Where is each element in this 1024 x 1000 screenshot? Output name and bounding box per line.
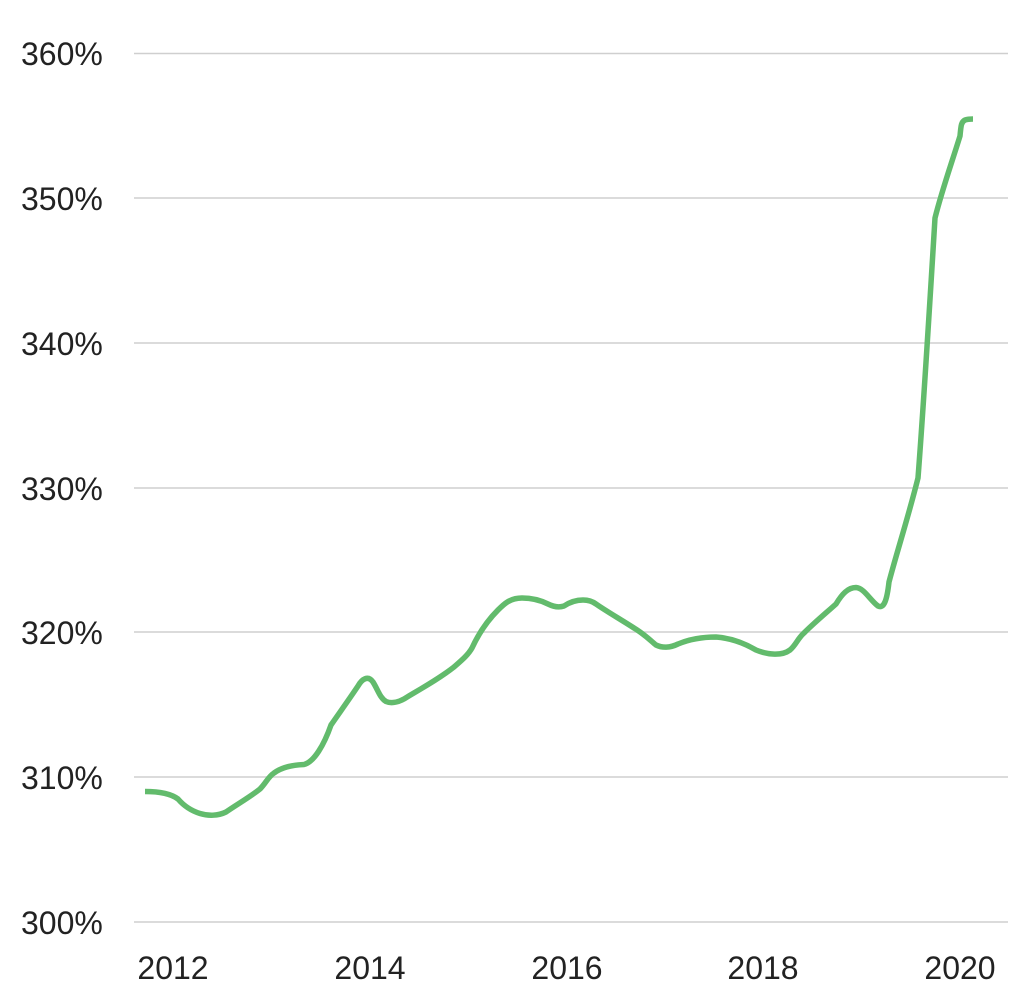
x axis labels: [137, 950, 996, 986]
y axis labels: 350%: [21, 181, 103, 217]
x axis labels: 2014: [334, 950, 406, 986]
x axis labels: 2020: [924, 950, 996, 986]
y axis labels: 330%: [21, 471, 103, 507]
y axis labels: 300%: [21, 905, 103, 941]
y axis labels: 310%: [21, 760, 103, 796]
y axis labels: 320%: [21, 615, 103, 651]
x axis labels: 2016: [531, 950, 603, 986]
y axis labels: [21, 36, 103, 941]
x axis labels: 2018: [727, 950, 799, 986]
data line: [145, 119, 973, 815]
y axis labels: 340%: [21, 326, 103, 362]
y axis labels: 360%: [21, 36, 103, 72]
x axis labels: 2012: [137, 950, 209, 986]
